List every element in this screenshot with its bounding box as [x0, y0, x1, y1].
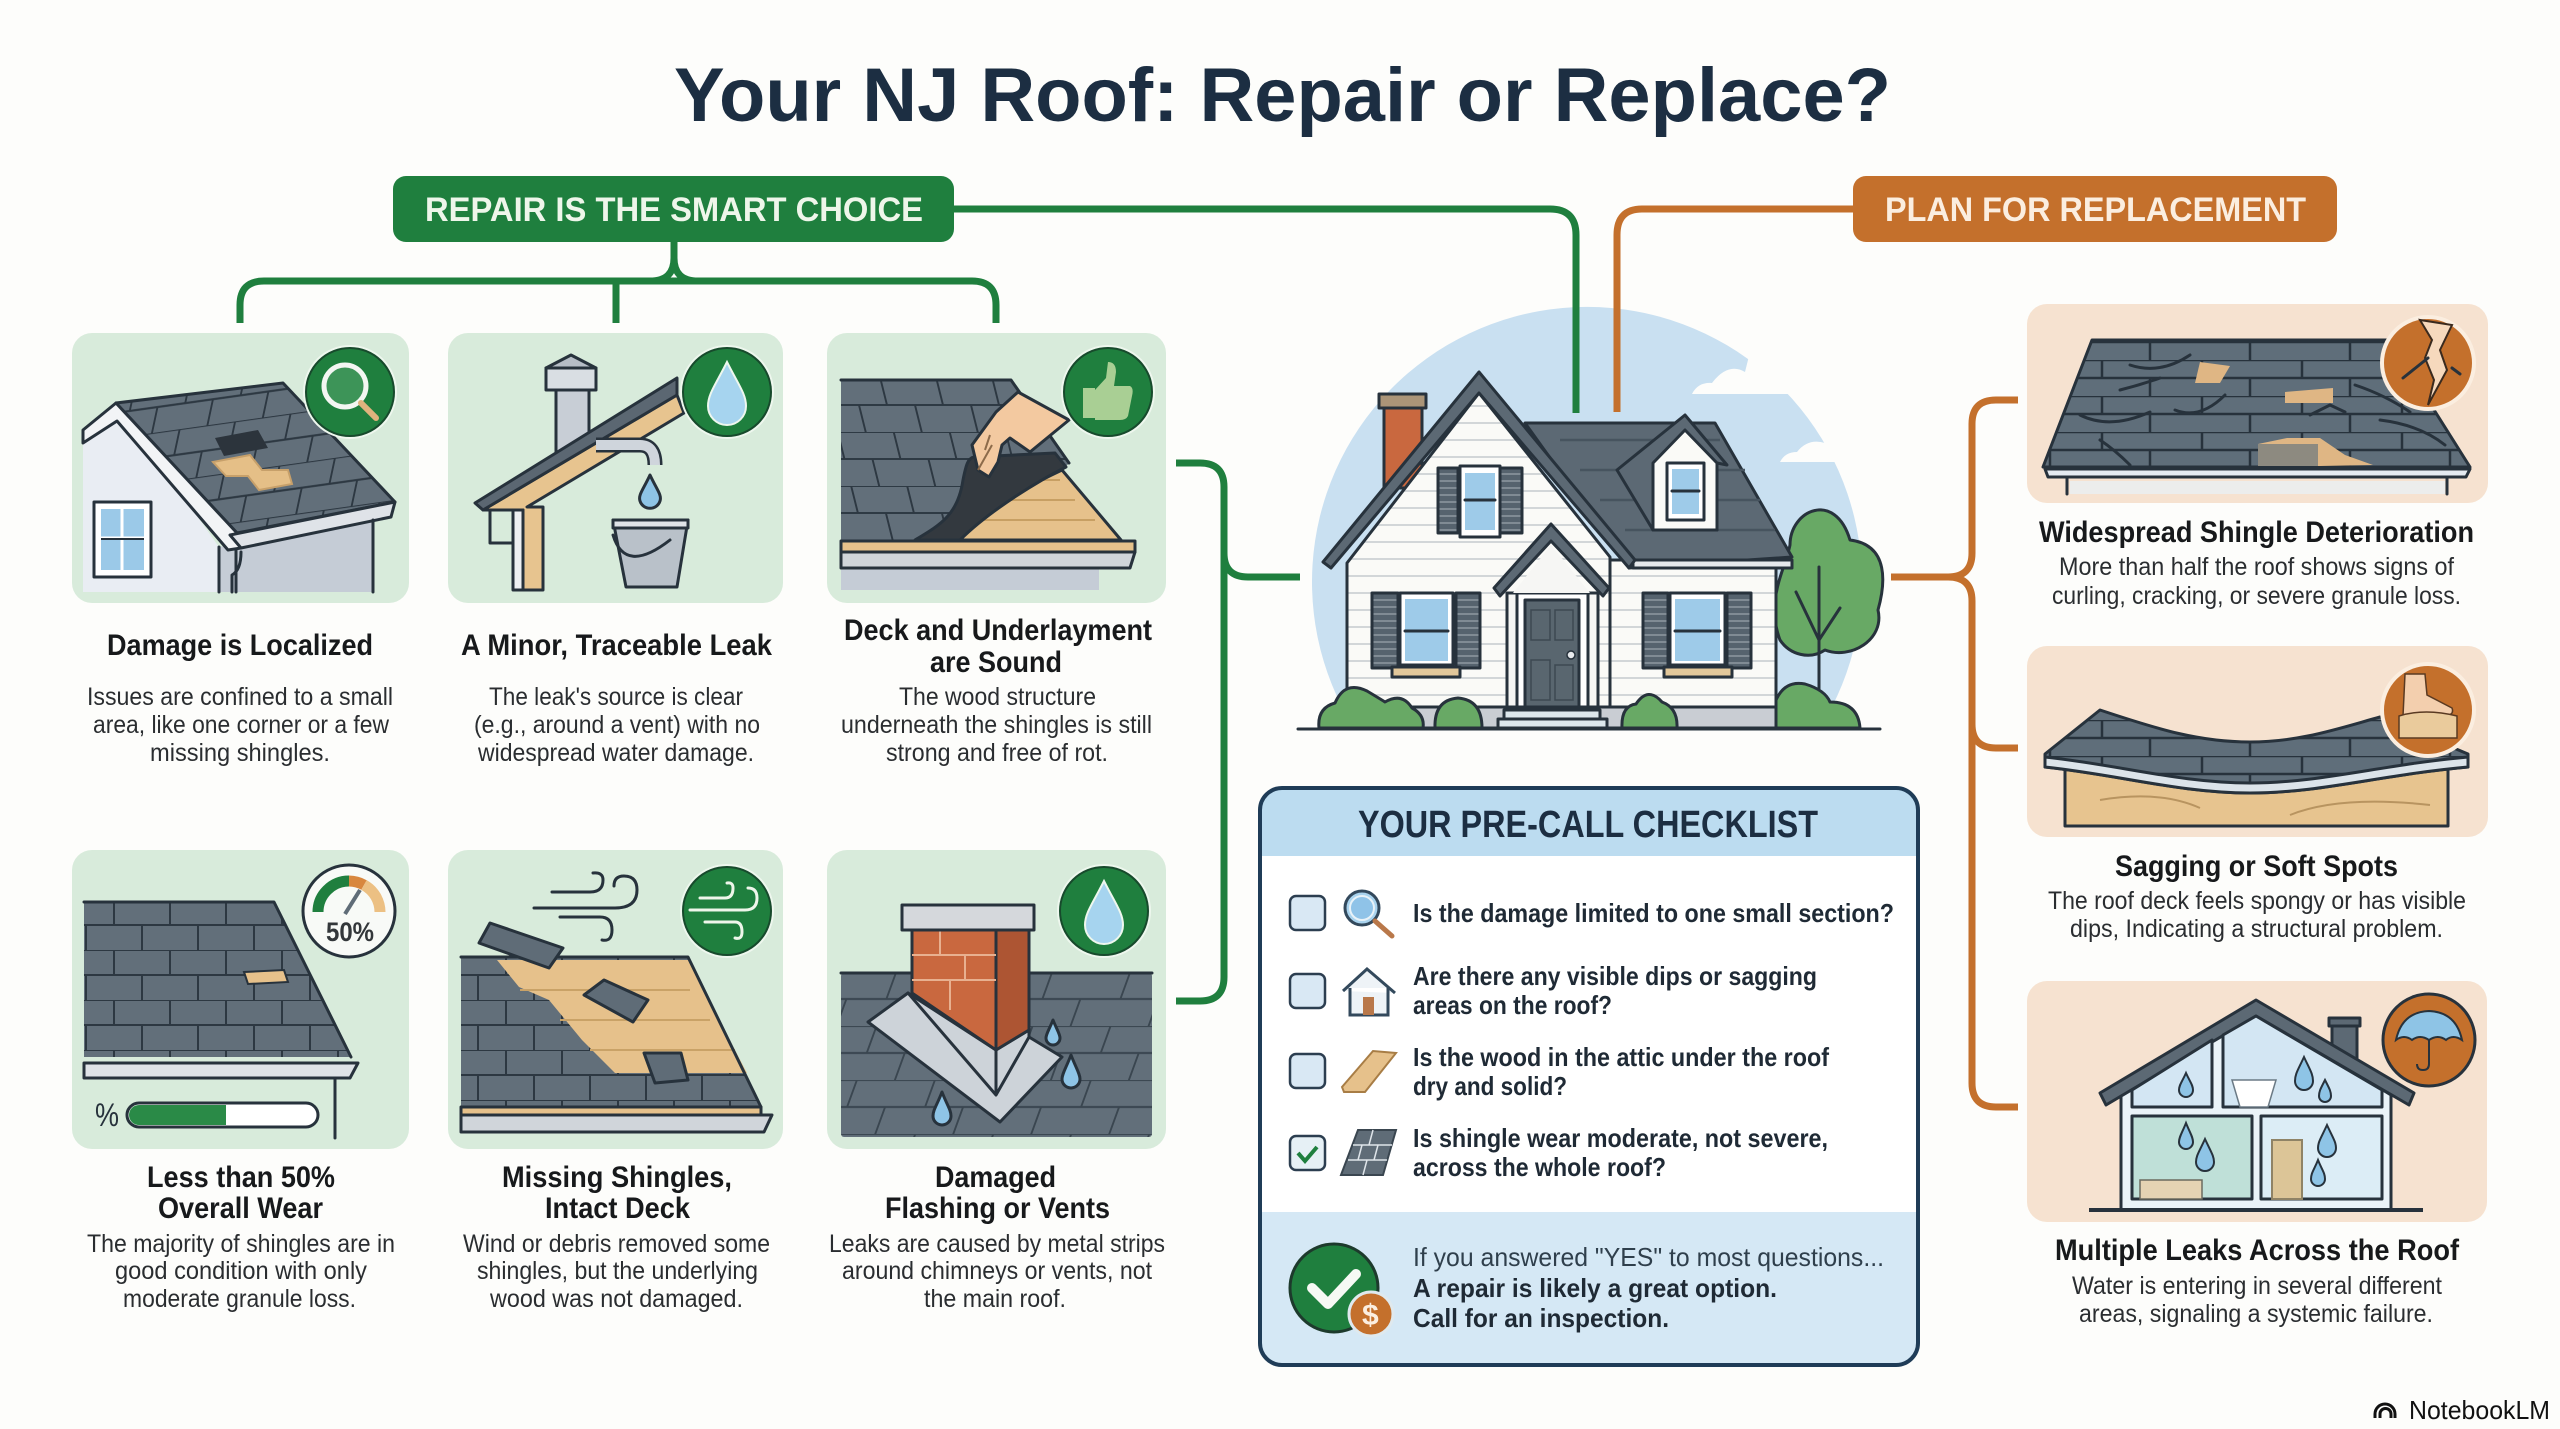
illustration: central house: [1298, 307, 1883, 729]
illustration: house cross section: [2089, 1000, 2423, 1210]
icon: water drop: [1057, 864, 1151, 958]
checklist item 3: [1290, 1042, 1829, 1101]
dormer: [1617, 415, 1727, 530]
text: card description: The majority of shingles are in: [87, 1230, 395, 1258]
panel: minor traceable leak: [448, 333, 783, 767]
connector: repair to house: [954, 209, 1576, 413]
text: card description: dips, Indicating a structural problem.: [2070, 915, 2443, 943]
callout text: If you answered "YES" to most questions...: [1413, 1242, 1884, 1272]
checklist item 4: [1290, 1123, 1828, 1182]
icon: thumbs up: [1061, 345, 1155, 439]
text: card title: Intact Deck: [545, 1192, 690, 1225]
checklist item 3: dry and solid?: [1413, 1071, 1567, 1101]
checklist item 2: Are there any visible dips or sagging: [1413, 961, 1817, 991]
text: card description: missing shingles.: [150, 739, 330, 767]
lower left window: [1372, 593, 1480, 677]
text: card description: [841, 683, 1152, 767]
text: card title: Overall Wear: [158, 1192, 323, 1225]
sky circle: [1312, 307, 1862, 728]
panel: widespread shingle deterioration: [2027, 304, 2488, 610]
text: card title: [844, 614, 1152, 679]
text: card description: [2048, 887, 2466, 943]
badge: replacement: [1853, 176, 2337, 242]
icon: check and coin: [1290, 1244, 1393, 1336]
illustration: deteriorated roof: [2043, 340, 2470, 494]
checklist item 4: across the whole roof?: [1413, 1152, 1666, 1182]
text: card title: Flashing or Vents: [885, 1192, 1110, 1225]
text: card description: curling, cracking, or severe granule loss.: [2052, 582, 2461, 610]
text: card description: [2072, 1272, 2442, 1328]
icon: magnifier: [303, 345, 397, 439]
icon: 50% gauge: [303, 865, 395, 957]
text: card description: [463, 1230, 770, 1313]
text: card title: Multiple Leaks Across the Roof: [2055, 1234, 2460, 1267]
text: card title: Damaged: [935, 1161, 1056, 1194]
checklist item 2: areas on the roof?: [1413, 990, 1612, 1020]
icon: umbrella: [2383, 994, 2475, 1086]
gable band: [1323, 372, 1635, 568]
text: card title: [147, 1161, 335, 1225]
progress bar: [95, 1097, 318, 1133]
text: card description: shingles, but the underlying: [477, 1257, 758, 1285]
text: card title: Sagging or Soft Spots: [2115, 850, 2398, 883]
checklist item 4: Is shingle wear moderate, not severe,: [1413, 1123, 1828, 1153]
text: card title: A Minor, Traceable Leak: [461, 629, 772, 662]
lower right window: [1643, 593, 1751, 677]
title: Your NJ Roof: Repair or Replace?: [674, 53, 1891, 138]
text: card description: [87, 1230, 395, 1313]
panel: sagging or soft spots: [2027, 646, 2488, 943]
text: card description: [87, 683, 393, 767]
panel: missing shingles, intact deck: [448, 850, 783, 1313]
walls: [1347, 393, 1610, 707]
text: card description: The wood structure: [899, 683, 1096, 711]
text: card title: Deck and Underlayment: [844, 614, 1152, 647]
progress bar: %: [95, 1097, 119, 1133]
text: card title: [885, 1161, 1110, 1225]
text: card title: Damage is Localized: [107, 629, 373, 662]
text: card title: [502, 1161, 732, 1225]
text: card description: around chimneys or vents, not: [842, 1257, 1152, 1285]
text: card title: Less than 50%: [147, 1161, 335, 1194]
panel: multiple leaks across the roof: [2027, 981, 2487, 1328]
illustration: roof with missing shingle: [83, 383, 395, 592]
tree: [1775, 510, 1883, 707]
illustration: exposed deck: [461, 873, 772, 1132]
connector: repair cards to house: [1176, 463, 1300, 1001]
icon: foot on soft spot: [2382, 664, 2474, 756]
bushes: [1319, 683, 1860, 728]
panel: damaged flashing or vents: [827, 850, 1166, 1313]
text: card title: Widespread Shingle Deterioration: [2039, 516, 2474, 549]
text: card description: [829, 1230, 1165, 1313]
text: card title: Missing Shingles,: [502, 1161, 732, 1194]
text: card description: good condition with only: [115, 1257, 367, 1285]
panel: pre-call checklist: [1260, 788, 1918, 1365]
illustration: vent, rafter and bucket: [475, 355, 688, 590]
illustration: worn roof: [84, 902, 358, 1138]
text: card description: The leak's source is clear: [489, 683, 743, 711]
icon: 50% gauge: 50%: [326, 917, 374, 947]
panel: damage is localized: [72, 333, 409, 767]
heading: YOUR PRE-CALL CHECKLIST: [1358, 804, 1818, 846]
text: card description: areas, signaling a systemic failure.: [2079, 1300, 2433, 1328]
callout text: [1413, 1242, 1884, 1333]
badge: repair: REPAIR IS THE SMART CHOICE: [425, 191, 923, 229]
connector: house to replacement cards: [1891, 400, 2018, 1107]
illustration: chimney flashing: [841, 905, 1152, 1137]
text: card description: the main roof.: [924, 1285, 1066, 1313]
main roof: [1525, 423, 1792, 568]
porch and door: [1494, 524, 1609, 707]
illustration: hand lifting shingle: [841, 380, 1135, 590]
icon: check and coin: $: [1362, 1299, 1379, 1332]
text: card description: area, like one corner or a few: [93, 711, 390, 739]
badge: repair: [393, 176, 954, 242]
ground line: [1298, 728, 1880, 730]
chimney: [1379, 394, 1426, 488]
text: card description: Leaks are caused by metal strips: [829, 1230, 1165, 1258]
text: card description: More than half the roof shows signs of: [2059, 553, 2454, 581]
text: card description: widespread water damage.: [477, 739, 754, 767]
text: card title: are Sound: [930, 646, 1062, 679]
illustration: sagging roof: [2045, 710, 2468, 826]
icon: wind: [680, 864, 774, 958]
connector: replacement to house: [1617, 209, 1853, 412]
text: card description: wood was not damaged.: [489, 1285, 743, 1313]
text: card description: moderate granule loss.: [123, 1285, 356, 1313]
connector: repair badge to top cards: [240, 242, 996, 323]
panel: deck and underlayment are sound: [827, 333, 1166, 767]
text: card description: Issues are confined to a small: [87, 683, 393, 711]
text: card description: Water is entering in several different: [2072, 1272, 2442, 1300]
text: card description: underneath the shingles is still: [841, 711, 1152, 739]
checklist item 1: Is the damage limited to one small section?: [1413, 898, 1894, 928]
text: card description: [474, 683, 760, 767]
icon: crack: [2382, 317, 2474, 409]
steps: [1498, 710, 1607, 728]
text: card description: strong and free of rot.: [886, 739, 1108, 767]
text: card description: The roof deck feels spongy or has visible: [2048, 887, 2466, 915]
callout text: A repair is likely a great option.: [1413, 1273, 1777, 1303]
checklist item 1: [1290, 891, 1894, 936]
icon: water drop: [680, 345, 774, 439]
checklist item 3: Is the wood in the attic under the roof: [1413, 1042, 1829, 1072]
callout text: Call for an inspection.: [1413, 1303, 1669, 1333]
text: card description: [2052, 553, 2461, 610]
text: card description: Wind or debris removed some: [463, 1230, 770, 1258]
upper window: [1438, 466, 1522, 537]
text: card description: (e.g., around a vent) with no: [474, 711, 760, 739]
panel: less than 50% overall wear: [72, 850, 409, 1313]
badge: replacement: PLAN FOR REPLACEMENT: [1885, 191, 2306, 229]
checklist item 2: [1290, 961, 1817, 1020]
watermark: NotebookLM: NotebookLM: [2409, 1395, 2550, 1425]
